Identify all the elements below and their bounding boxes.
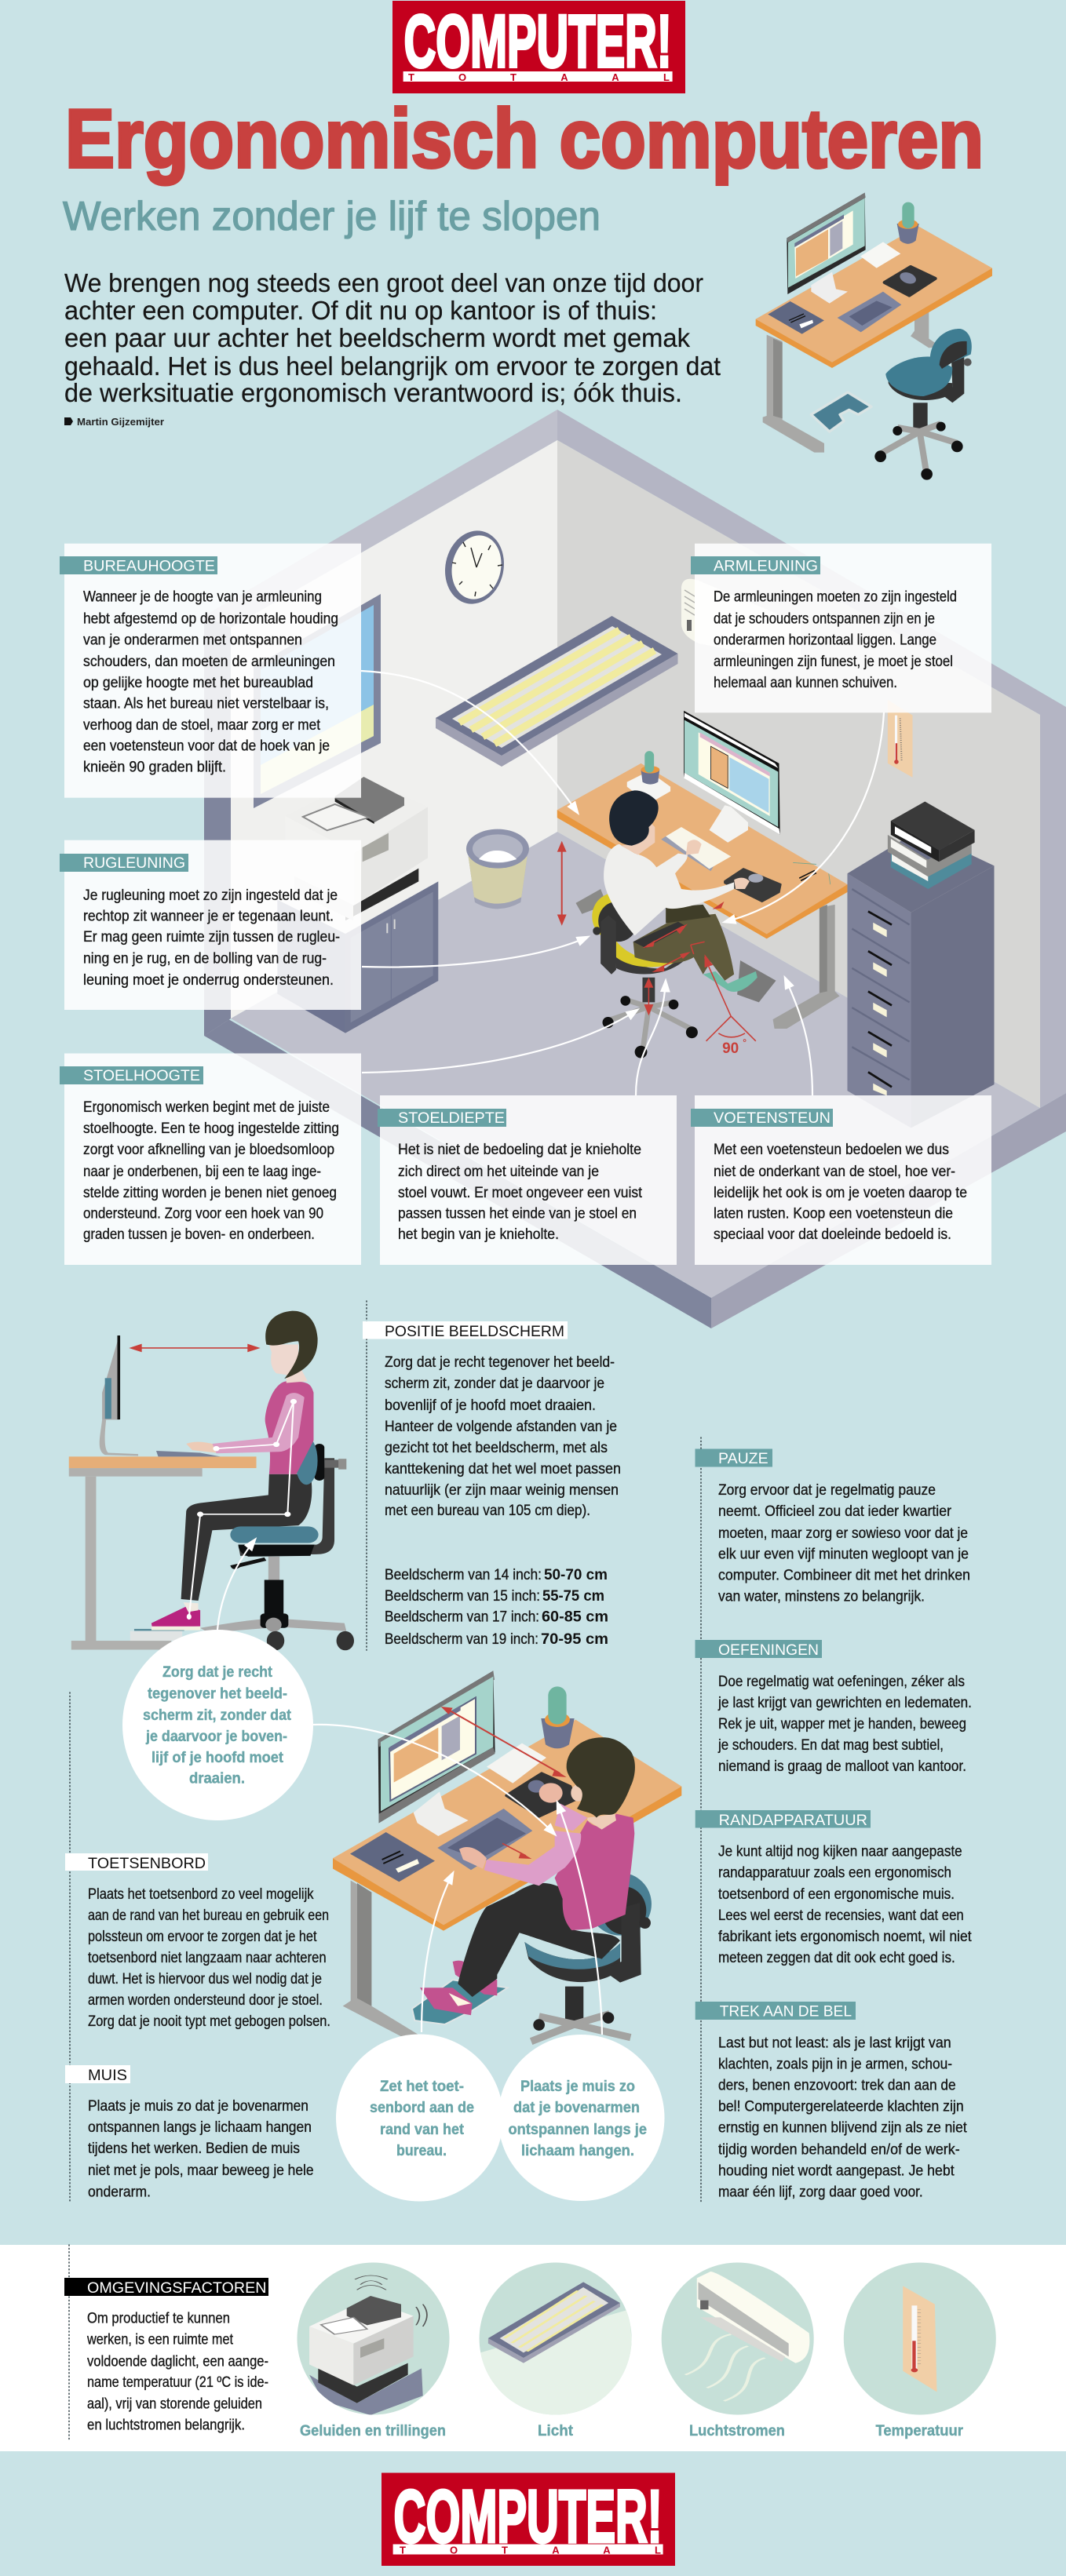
section: randapparatuur: RANDAPPARATUUR — [719, 1812, 867, 1829]
panel: stoelhoogte: ondersteund. Zorg voor een hoek van 90 — [83, 1205, 323, 1222]
panel: voetensteun: leidelijk het ook is om je voeten daarop te — [714, 1184, 967, 1201]
intro text: We brengen nog steeds een groot deel van onze tijd door — [64, 268, 703, 297]
section: trek aan de bel: maar één lijf, zorg daar goed voor. — [718, 2183, 923, 2200]
panel: bureauhoogte: op gelijke hoogte met het bureaublad — [83, 674, 313, 691]
heading: omgevingsfactoren: OMGEVINGSFACTOREN — [87, 2279, 267, 2297]
intro text — [64, 268, 721, 407]
chair — [524, 1873, 652, 1983]
desk objects — [350, 1686, 575, 1882]
panel: stoeldiepte: Het is niet de bedoeling dat je knieholte — [398, 1141, 641, 1158]
section: toetsenbord: aan de rand van het bureau en gebruik een — [88, 1907, 329, 1924]
intro text: een paar uur achter het beeldscherm wordt met gemak — [64, 323, 690, 352]
logo: Computer Totaal bottom: COMPUTER! — [394, 2475, 663, 2558]
keyboard and mouse — [661, 827, 831, 902]
intro text: achter een computer. Of dit nu op kantoor is of thuis: — [64, 296, 657, 325]
section: positie beeldscherm: 55-75 cm — [542, 1588, 604, 1605]
icon labels: Licht — [538, 2423, 574, 2439]
waste bin — [466, 829, 529, 909]
callout circle: recht tegenover beeldscherm: scherm zit, zonder dat — [143, 1707, 292, 1724]
section: trek aan de bel: ernstig en kunnen blijvend zijn als ze niet — [718, 2119, 967, 2137]
panel: omgevingsfactoren band — [0, 2245, 1066, 2451]
monitor side view — [100, 1335, 138, 1456]
section: positie beeldscherm: scherm zit, zonder dat je daarvoor je — [385, 1375, 604, 1392]
panel: bureauhoogte: verhoog dan de stoel, maar zorg er met — [83, 716, 321, 734]
section: pauze: PAUZE — [718, 1450, 768, 1467]
illustration: empty isometric desk with chair — [756, 193, 992, 480]
panel: bureauhoogte: knieën 90 graden blijft. — [83, 758, 226, 775]
panel: rugleuning: ning en je rug, en de bolling van de rug- — [83, 949, 327, 967]
illustration: isometric woman at desk — [333, 1671, 681, 2042]
panel: armleuning — [691, 544, 991, 712]
callout circle: toetsenbord: senbord aan de — [370, 2100, 474, 2116]
panel: armleuning: De armleuningen moeten zo zijn ingesteld — [714, 588, 957, 606]
chair — [575, 887, 691, 975]
panel: voetensteun: Met een voetensteun bedoelen we dus — [714, 1141, 949, 1158]
panel: bureauhoogte: een voetensteun voor dat de hoek van je — [83, 738, 330, 755]
panel: stoelhoogte: STOELHOOGTE — [83, 1067, 200, 1084]
panel: bureauhoogte: BUREAUHOOGTE — [83, 557, 215, 574]
section: toetsenbord: TOETSENBORD — [88, 1855, 206, 1872]
section: muis: MUIS — [88, 2067, 127, 2084]
section: positie beeldscherm: Zorg dat je recht tegenover het beeld- — [385, 1354, 615, 1371]
icon: thermometer — [844, 2263, 996, 2415]
section: positie beeldscherm: Beeldscherm van 14 inch: — [385, 1566, 542, 1583]
section: positie beeldscherm: Hanteer de volgende afstanden van je — [385, 1418, 617, 1435]
section: muis — [65, 2065, 314, 2200]
section: oefeningen: Doe regelmatig wat oefeningen, zéker als — [718, 1673, 965, 1690]
panel: stoeldiepte — [378, 1095, 677, 1265]
window on left wall — [254, 594, 381, 808]
callout circle: muis: ontspannen langs je — [509, 2122, 647, 2138]
text: omgevingsfactoren: aal), vrij van storende geluiden — [87, 2395, 262, 2412]
section: randapparatuur: Je kunt altijd nog kijken naar aangepaste — [718, 1842, 962, 1860]
panel: bureauhoogte: Wanneer je de hoogte van je armleuning — [83, 588, 322, 606]
panel: rugleuning: rechtop zit wanneer je er tegenaan leunt. — [83, 908, 334, 925]
section: positie beeldscherm: POSITIE BEELDSCHERM — [385, 1323, 564, 1340]
section: positie beeldscherm: Beeldscherm van 17 inch: — [385, 1609, 539, 1626]
panel: bureauhoogte: schouders, dan moeten de armleuningen — [83, 653, 335, 670]
logo: Computer Totaal top — [392, 0, 685, 93]
panel: stoeldiepte: zich direct om het uiteinde van je — [398, 1163, 599, 1180]
icon labels — [300, 2423, 964, 2439]
red viewing distance arrow — [129, 1344, 261, 1352]
desk side view — [69, 1451, 257, 1649]
icon: light panel — [479, 2263, 632, 2415]
title: Ergonomisch computeren — [65, 93, 984, 185]
section: pauze: moeten, maar zorg er sowieso voor dat je — [718, 1525, 968, 1542]
section: oefeningen: niemand is graag de malloot van kantoor. — [718, 1758, 966, 1775]
panel: rugleuning — [60, 840, 361, 1010]
panel: stoelhoogte: naar je onderbenen, bij een te laag inge- — [83, 1163, 321, 1180]
section: muis: niet met je pols, maar beweeg je hele — [88, 2162, 314, 2179]
section: positie beeldscherm: Beeldscherm van 15 inch: — [385, 1587, 540, 1605]
intro text: de werksituatie ergonomisch verantwoord is; óók thuis. — [64, 378, 682, 407]
desk, cabinet and seated person — [557, 711, 994, 1128]
subtitle: Werken zonder je lijf te slopen — [63, 194, 601, 239]
icon labels: Geluiden en trillingen — [300, 2423, 446, 2439]
callout circle: recht tegenover beeldscherm: draaien. — [189, 1771, 245, 1787]
section: trek aan de bel — [695, 2002, 967, 2200]
monitor — [378, 1671, 495, 1836]
room shell: walls, floor and slab — [204, 410, 1066, 1328]
ceiling light — [436, 616, 678, 767]
panel: bureauhoogte — [60, 544, 361, 798]
callout circle: toetsenbord — [336, 2034, 503, 2202]
panel: armleuning: dat je schouders ontspannen zijn en je — [714, 610, 935, 627]
section: toetsenbord: Zorg dat je nooit typt met gebogen polsen. — [88, 2013, 330, 2030]
woman — [420, 1737, 635, 2015]
panel: bureauhoogte: staan. Als het bureau niet verstelbaar is, — [83, 695, 329, 712]
section: positie beeldscherm: Beeldscherm van 19 inch: — [385, 1630, 538, 1648]
section: trek aan de bel: tijdig worden behandeld en/of de werk- — [718, 2141, 960, 2158]
panel: voetensteun: VOETENSTEUN — [714, 1109, 831, 1127]
panel: rugleuning: leuning moet je onderrug ondersteunen. — [83, 971, 334, 989]
section: trek aan de bel: bel! Computergerelateerde klachten zijn — [718, 2098, 964, 2115]
dotted column rules — [70, 1301, 701, 2203]
section: pauze: van water, minstens zo belangrijk. — [718, 1588, 925, 1605]
section: randapparatuur: randapparatuur zoals een ergonomisch — [718, 1864, 951, 1881]
section: muis: onderarm. — [88, 2183, 151, 2200]
intro text: gehaald. Het is dus heel belangrijk om ervoor te zorgen dat — [64, 352, 721, 381]
panel: stoelhoogte: stelde zitting worden je benen niet genoeg — [83, 1184, 337, 1201]
red measurement arrows and 90 degree angle: ° — [743, 1037, 747, 1048]
section: oefeningen — [695, 1640, 972, 1775]
section: toetsenbord — [65, 1853, 330, 2030]
section: trek aan de bel: Last but not least: als je last krijgt van — [718, 2035, 951, 2052]
panel: rugleuning: Er mag geen ruimte zijn tussen de rugleu- — [83, 928, 340, 946]
section: positie beeldscherm: gezicht tot het beeldscherm, met als — [385, 1439, 608, 1456]
callout circle: toetsenbord: Zet het toet- — [380, 2079, 464, 2095]
panel: voetensteun — [691, 1095, 991, 1265]
panel: stoelhoogte: Ergonomisch werken begint met de juiste — [83, 1099, 330, 1116]
panel: rugleuning: Je rugleuning moet zo zijn ingesteld dat je — [83, 887, 338, 904]
thermometer on wall — [888, 700, 913, 778]
panel: voetensteun: speciaal voor dat doeleinde bedoeld is. — [714, 1226, 951, 1243]
arrow to chair seat — [217, 1539, 255, 1630]
air conditioner behind box — [681, 579, 801, 663]
logo: Computer Totaal bottom — [381, 2473, 675, 2566]
section: muis: ontspannen langs je lichaam hangen — [88, 2119, 312, 2136]
section: toetsenbord: toetsenbord niet langzaam naar achteren — [88, 1949, 327, 1966]
desk legs — [773, 905, 840, 1029]
person — [604, 790, 758, 992]
panel: bureauhoogte: hebt afgestemd op de horizontale houding — [83, 610, 338, 627]
red arrows — [441, 1707, 567, 1859]
panel: stoelhoogte — [60, 1053, 361, 1265]
room: isometric office — [60, 410, 1066, 1328]
section: positie beeldscherm: natuurlijk (er zijn maar weinig mensen — [385, 1481, 619, 1499]
section: pauze: Zorg ervoor dat je regelmatig pauze — [718, 1481, 936, 1499]
monitor — [684, 711, 780, 843]
section: positie beeldscherm: 60-85 cm — [542, 1609, 608, 1626]
callout circle: muis — [498, 2035, 664, 2201]
section: positie beeldscherm: bovenlijf of je hoofd moet draaien. — [385, 1397, 596, 1414]
icon: air conditioner — [662, 2263, 814, 2415]
red measurement arrows and 90 degree angle — [643, 902, 756, 1057]
panel: armleuning: ARMLEUNING — [714, 557, 818, 574]
panel: rugleuning: RUGLEUNING — [83, 854, 185, 872]
posture joint lines — [187, 1399, 297, 1620]
callout circle: muis: lichaam hangen. — [521, 2143, 634, 2159]
red measurement arrows and 90 degree angle: 90 — [722, 1040, 739, 1057]
panel: stoelhoogte: zorgt voor afknelling van je bloedsomloop — [83, 1141, 334, 1158]
section: positie beeldscherm — [363, 1321, 621, 1648]
callout circle: toetsenbord: rand van het — [380, 2122, 465, 2138]
section: positie beeldscherm: kanttekening dat het wel moet passen — [385, 1460, 621, 1477]
section: toetsenbord: armen worden ondersteund door je stoel. — [88, 1991, 323, 2009]
panel: stoeldiepte: stoel vouwt. Er moet ongeveer een vuist — [398, 1184, 643, 1201]
panel: armleuning: helemaal aan kunnen schuiven. — [714, 674, 897, 691]
panel: armleuning: onderarmen horizontaal liggen. Lange — [714, 632, 936, 649]
section: trek aan de bel: klachten, zoals pijn in je armen, schou- — [718, 2056, 952, 2073]
footrest and chair base — [412, 1980, 630, 2042]
icon: printer with sound waves — [297, 2263, 449, 2415]
wall clock — [439, 525, 510, 610]
callout circle: muis: Plaats je muis zo — [520, 2079, 635, 2095]
section: pauze: computer. Combineer dit met het drinken — [718, 1566, 970, 1583]
panel: armleuning: armleuningen zijn funest, je moet je stoel — [714, 653, 953, 670]
section: pauze: neemt. Officieel zou dat ieder kwartier — [718, 1503, 951, 1520]
desk top — [557, 763, 847, 938]
section: trek aan de bel: houding niet wordt aangepast. Je hebt — [718, 2162, 955, 2179]
section: oefeningen: je last krijgt van gewrichten en ledematen. — [717, 1694, 972, 1711]
section: positie beeldscherm: 70-95 cm — [541, 1631, 608, 1648]
text: omgevingsfactoren: en luchtstromen belangrijk. — [87, 2417, 245, 2434]
text: omgevingsfactoren: voldoende daglicht, een aange- — [87, 2352, 268, 2370]
author credit: Martin Gijzemijter — [77, 417, 164, 428]
section: pauze: elk uur even vijf minuten wegloopt van je — [718, 1546, 969, 1563]
section: oefeningen: OEFENINGEN — [718, 1641, 819, 1659]
section: randapparatuur: meteen zeggen dat dit ook echt goed is. — [718, 1949, 955, 1966]
panel: stoeldiepte: het begin van je knieholte. — [398, 1226, 559, 1243]
plant — [627, 751, 670, 803]
arrows from circles to desk — [313, 1725, 602, 2035]
section: toetsenbord: polssteun om ervoor te zorgen dat je het — [88, 1928, 317, 1945]
binders — [888, 802, 975, 889]
desk top — [333, 1720, 681, 1931]
section: randapparatuur: toetsenbord of een ergonomische muis. — [718, 1886, 955, 1903]
text: omgevingsfactoren: Om productief te kunnen — [87, 2310, 230, 2327]
text: omgevingsfactoren: name temperatuur (21 ºC is ide- — [87, 2374, 268, 2391]
panel: voetensteun: niet de onderkant van de stoel, hoe ver- — [714, 1163, 955, 1180]
section: oefeningen: Rek je uit, wapper met je handen, beweeg — [718, 1715, 966, 1733]
icon labels: Temperatuur — [876, 2423, 964, 2439]
panel: stoeldiepte: passen tussen het einde van je stoel en — [398, 1205, 637, 1222]
callout circle: recht tegenover beeldscherm — [122, 1630, 313, 1820]
text: omgevingsfactoren — [86, 2310, 268, 2434]
filing cabinet — [847, 830, 994, 1128]
arrows from panels to room objects — [361, 671, 884, 1095]
section: randapparatuur — [695, 1810, 972, 1966]
callout circle: recht tegenover beeldscherm: tegenover het beeld- — [148, 1685, 287, 1703]
callout circle: toetsenbord: bureau. — [396, 2143, 447, 2159]
callout circle: recht tegenover beeldscherm: lijf of je hoofd moet — [152, 1750, 284, 1766]
section: toetsenbord: duwt. Het is hiervoor dus wel nodig dat je — [88, 1970, 322, 1988]
section: randapparatuur: Lees wel eerst de recensies, want dat een — [718, 1907, 964, 1924]
panel: stoelhoogte: graden tussen je boven- en onderbeen. — [83, 1226, 315, 1243]
section: trek aan de bel: ders, benen enzovoort: trek dan aan de — [718, 2077, 956, 2094]
section: positie beeldscherm: met een bureau van 105 cm diep). — [385, 1502, 590, 1519]
desk height arrow — [557, 841, 567, 926]
section: toetsenbord: Plaats het toetsenbord zo veel mogelijk — [88, 1886, 314, 1903]
logo: Computer Totaal bottom: TOTAAL — [400, 2544, 661, 2556]
logo: Computer Totaal top: TOTAAL — [408, 71, 670, 83]
panel: bureauhoogte: van je onderarmen met ontspannen — [83, 632, 302, 649]
section: positie beeldscherm: 50-70 cm — [544, 1567, 608, 1583]
callout circle: recht tegenover beeldscherm: Zorg dat je recht — [162, 1664, 273, 1681]
panel: voetensteun: laten rusten. Koop een voetensteun die — [714, 1205, 953, 1222]
illustration: side view of seated woman — [69, 1311, 354, 1650]
section: pauze — [695, 1448, 970, 1605]
desk legs — [343, 1881, 418, 2040]
callout circle: recht tegenover beeldscherm: je daarvoor je boven- — [145, 1729, 287, 1745]
footrest and chair base — [602, 960, 776, 1058]
text: omgevingsfactoren: werken, is een ruimte met — [86, 2331, 233, 2348]
section: muis: tijdens het werken. Bedien de muis — [88, 2140, 300, 2157]
office chair side view — [200, 1444, 354, 1650]
panel: stoeldiepte: STOELDIEPTE — [398, 1109, 505, 1127]
section: muis: Plaats je muis zo dat je bovenarmen — [88, 2097, 308, 2115]
section: oefeningen: je schouders. En dat mag best subtiel, — [717, 1736, 944, 1754]
callout circle: muis: dat je bovenarmen — [513, 2100, 640, 2116]
icon labels: Luchtstromen — [689, 2423, 785, 2439]
woman — [152, 1311, 319, 1630]
printer on cabinet — [277, 777, 438, 1033]
section: trek aan de bel: TREK AAN DE BEL — [720, 2003, 852, 2020]
section: randapparatuur: fabrikant iets ergonomisch noemt, wil niet — [718, 1928, 972, 1945]
panel: stoelhoogte: stoelhoogte. Een te hoog ingestelde zitting — [83, 1120, 339, 1137]
logo: Computer Totaal top: COMPUTER! — [404, 0, 672, 83]
